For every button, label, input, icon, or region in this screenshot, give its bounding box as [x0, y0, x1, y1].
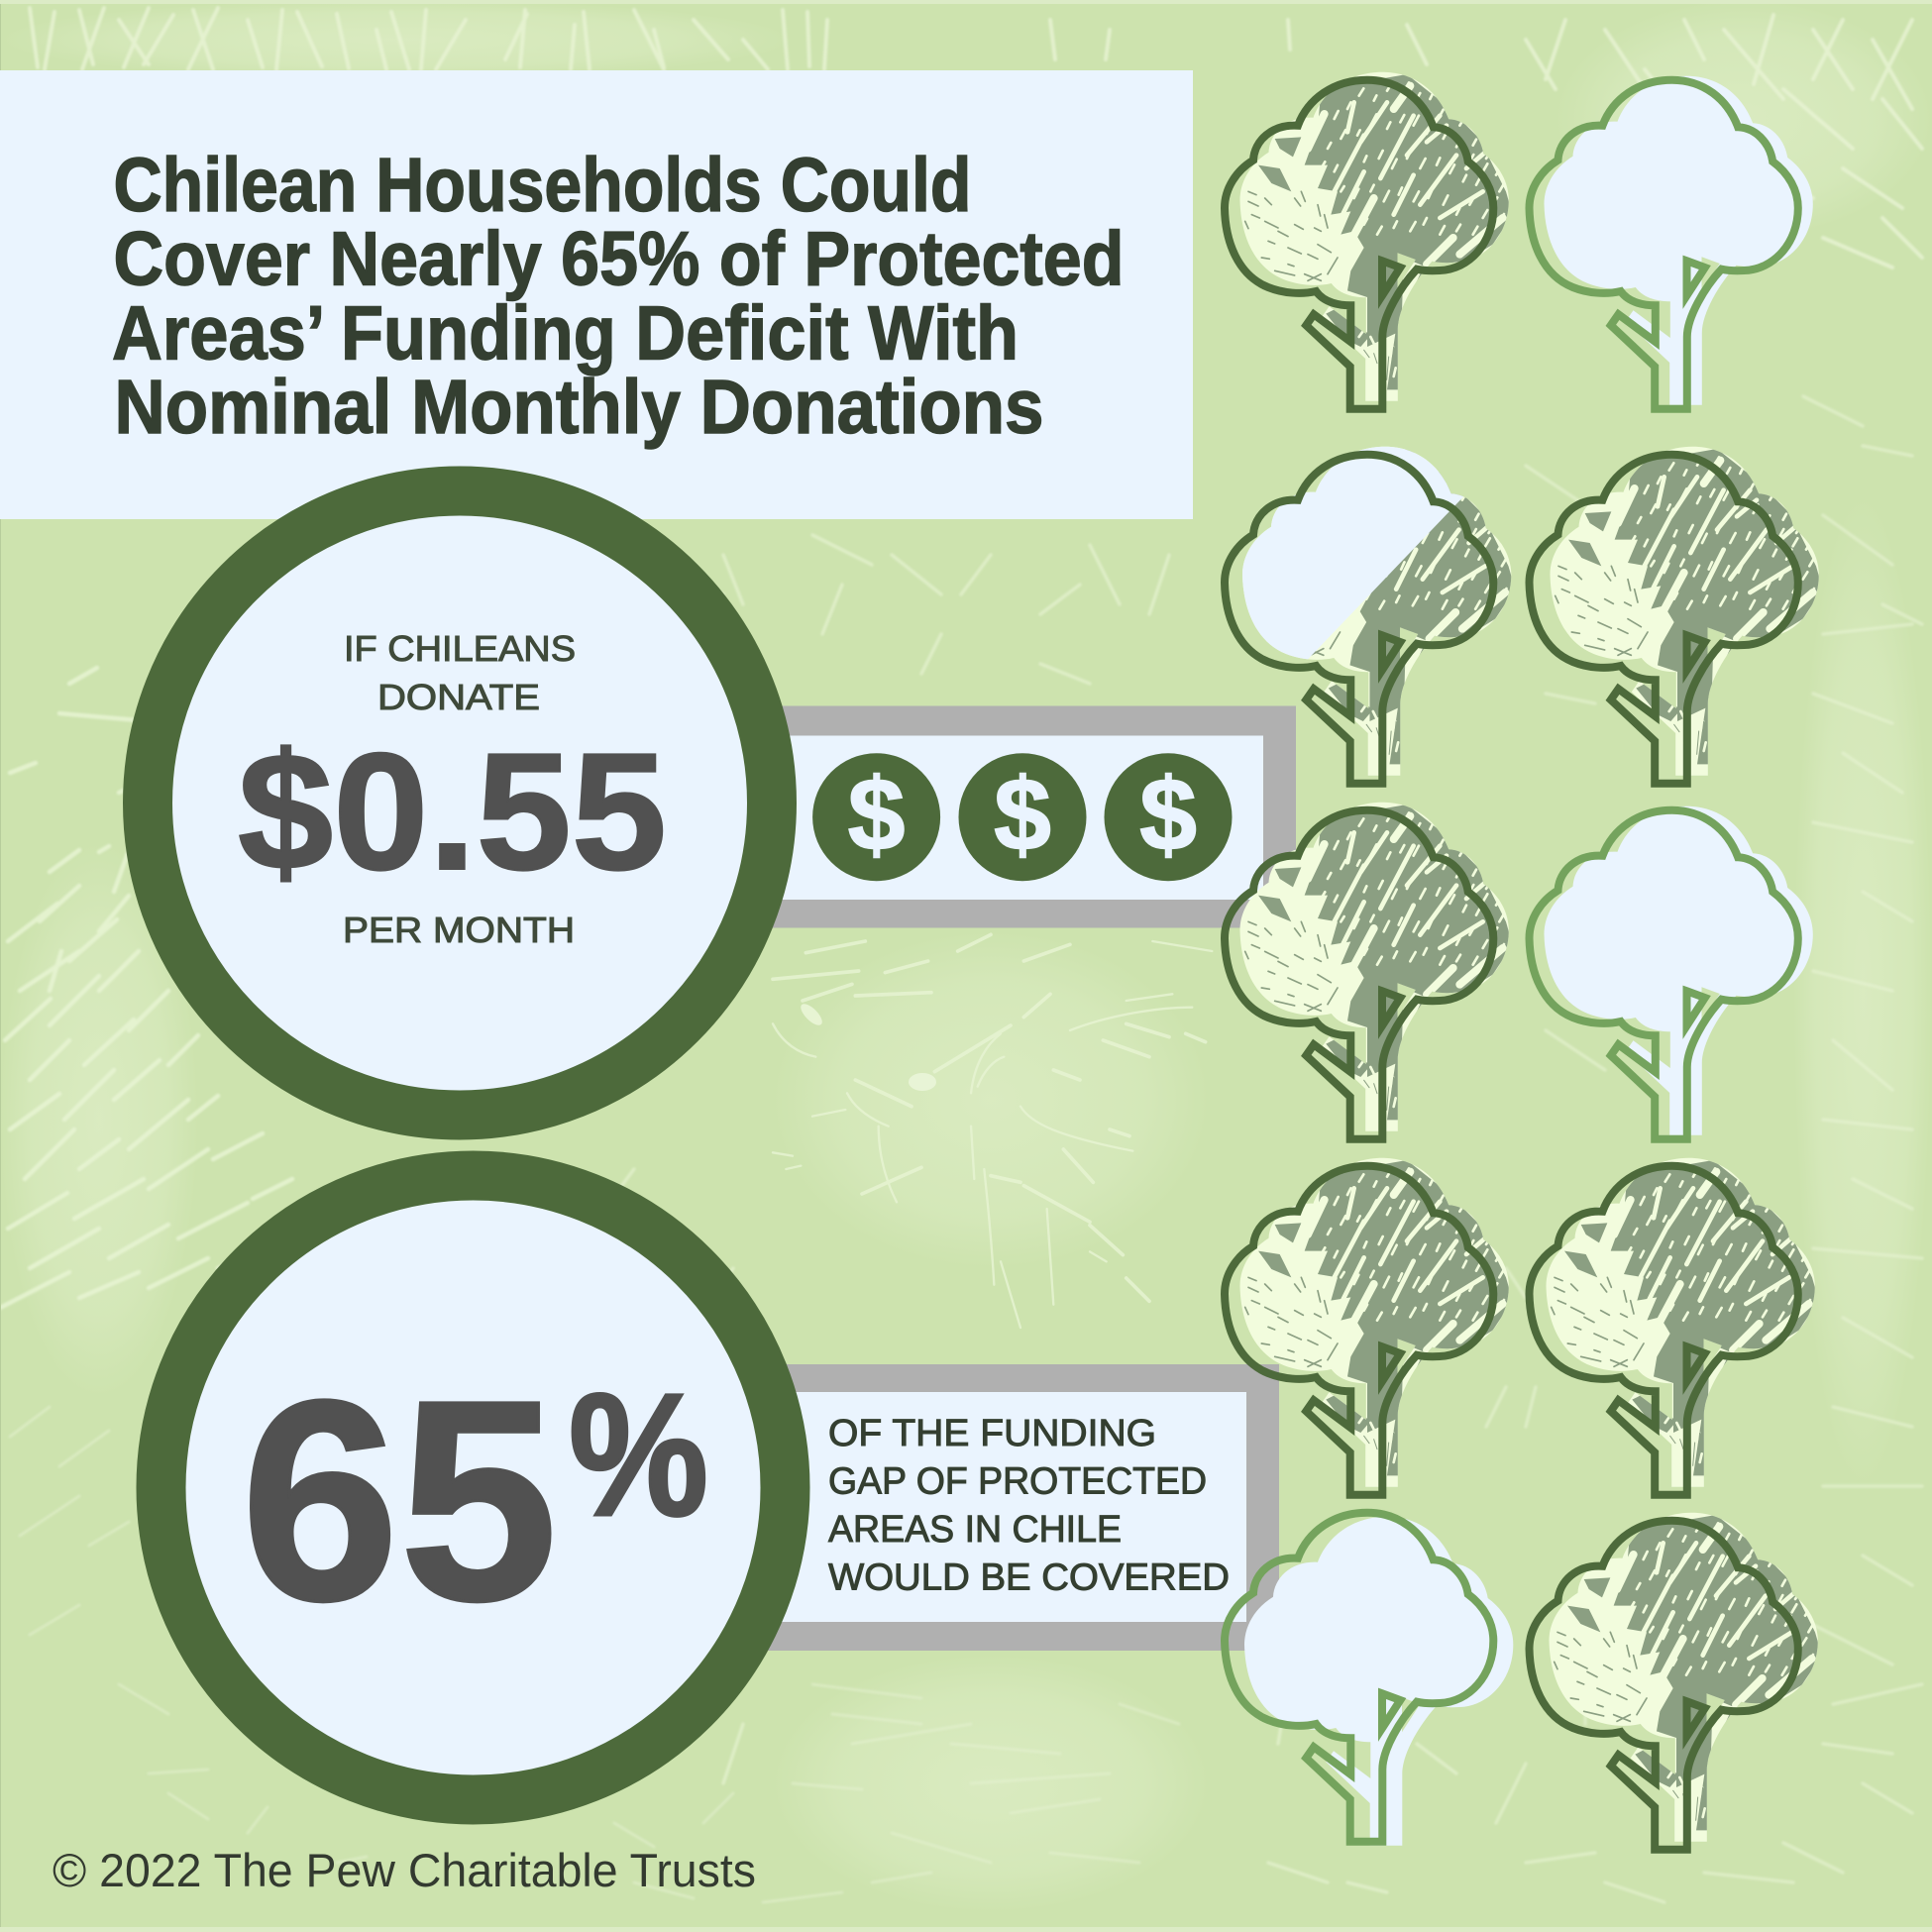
title: Areas’ Funding Deficit With — [112, 291, 1019, 376]
icon: dollar coin 3: $ — [1139, 758, 1197, 873]
percent value: 65 — [241, 1342, 558, 1661]
donate label: DONATE — [377, 677, 540, 717]
title: Nominal Monthly Donations — [115, 365, 1044, 450]
funding gap text: AREAS IN CHILE — [828, 1509, 1122, 1551]
tree row 1 left: funded — [1222, 66, 1519, 409]
percent value: % — [569, 1358, 708, 1553]
tree grid — [1207, 66, 1829, 1850]
copyright: © 2022 The Pew Charitable Trusts — [53, 1844, 756, 1896]
tree row 2 left: partly funded — [1221, 446, 1512, 788]
title panel — [0, 70, 1193, 519]
donate label: IF CHILEANS — [344, 628, 576, 669]
tree row 1 right: unfunded — [1530, 76, 1813, 409]
icon: dollar coin 3 — [1104, 753, 1233, 881]
funding gap text: OF THE FUNDING — [828, 1413, 1156, 1454]
grass detail between the two bars — [773, 934, 1212, 1328]
icon: dollar coin 2 — [959, 753, 1086, 881]
icon: dollar coin 1: $ — [848, 758, 906, 873]
tree row 3 right: unfunded — [1530, 806, 1813, 1139]
tree row 5 left: unfunded — [1225, 1513, 1513, 1846]
title: Chilean Households Could — [113, 143, 971, 228]
circle: donation amount — [148, 491, 772, 1116]
circle: percent covered — [161, 1175, 785, 1799]
funding gap text: WOULD BE COVERED — [828, 1557, 1230, 1599]
title: Cover Nearly 65% of Protected — [113, 217, 1124, 302]
funding gap text: GAP OF PROTECTED — [828, 1460, 1207, 1502]
funding gap text — [828, 1413, 1230, 1599]
tree row 2 right: funded — [1530, 441, 1829, 784]
tree row 3 left: funded — [1222, 797, 1519, 1139]
amount: $0.55 — [238, 718, 667, 905]
icon: dollar coin 2: $ — [994, 758, 1051, 873]
icon: dollar coin 1 — [812, 753, 940, 881]
grass seed blobs — [798, 1001, 936, 1091]
funding gap bar — [763, 1364, 1279, 1651]
tree row 5 right: funded — [1530, 1507, 1828, 1850]
percent value — [241, 1342, 708, 1661]
tree row 4 right: funded — [1528, 1152, 1825, 1495]
tree row 4 left: funded — [1222, 1152, 1519, 1495]
per month label: PER MONTH — [343, 910, 575, 950]
title — [112, 143, 1124, 450]
donation bar with coins — [753, 705, 1296, 927]
donate label — [344, 628, 576, 717]
